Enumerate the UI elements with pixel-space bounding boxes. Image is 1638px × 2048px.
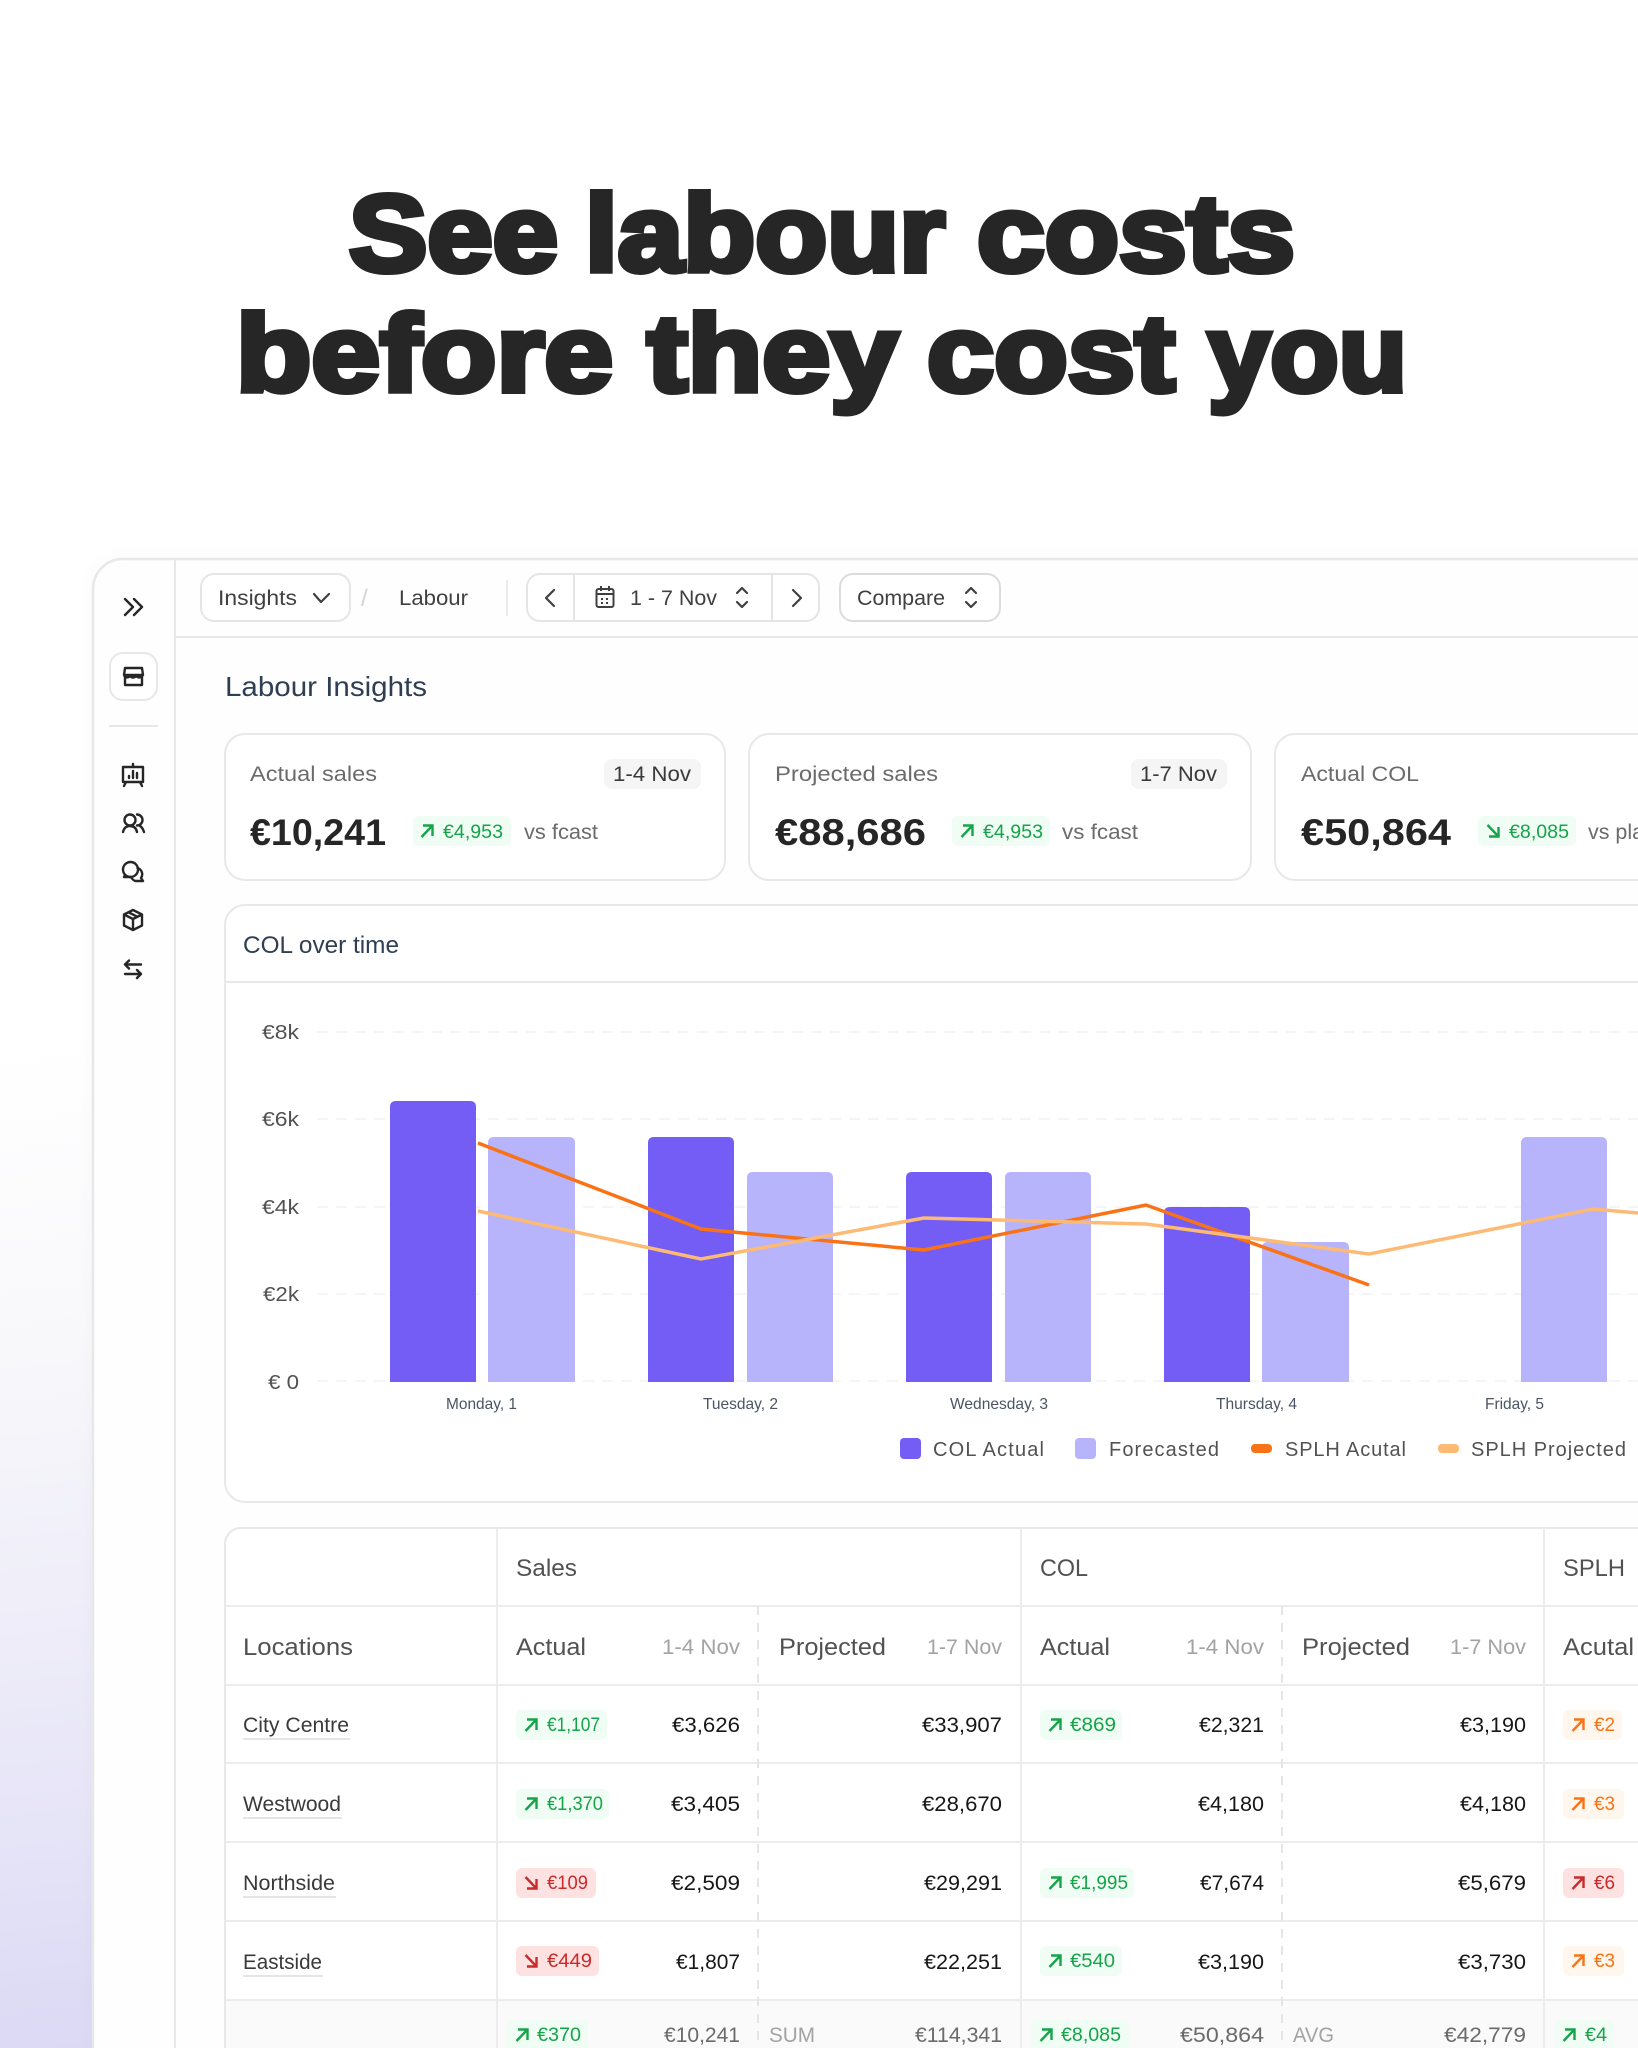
row: Northside: €2,509 — [671, 1872, 740, 1895]
row: Northside: €7,674 — [1200, 1872, 1264, 1895]
row: Westwood: €1,370 — [547, 1794, 603, 1815]
compare dropdown — [840, 574, 1000, 621]
row: Westwood: €4,180 — [1460, 1793, 1526, 1816]
table column headers: Actual — [1040, 1634, 1110, 1661]
row: Westwood: €28,670 — [922, 1793, 1002, 1816]
icon: box — [124, 910, 142, 930]
row: Northside: €5,679 — [1458, 1872, 1526, 1895]
row: Northside — [243, 1868, 1624, 1898]
row: City Centre: City Centre — [243, 1714, 349, 1737]
row: Westwood: €3,405 — [671, 1793, 740, 1816]
row: Westwood: €3 — [1594, 1794, 1615, 1815]
title: before — [236, 293, 613, 415]
row: totals: €114,341 — [915, 2024, 1002, 2047]
date range picker — [527, 574, 819, 621]
row: City Centre: €3,190 — [1460, 1714, 1526, 1737]
y axis labels: € 0 — [268, 1372, 299, 1394]
date badge: 1-4 Nov — [613, 763, 692, 786]
row: totals: €42,779 — [1444, 2024, 1526, 2047]
row: Eastside: €3 — [1594, 1951, 1615, 1972]
table grid — [226, 1529, 1638, 2048]
table column headers: 1-4 Nov — [1186, 1636, 1265, 1659]
bars: forecasted — [488, 1137, 1607, 1382]
y axis labels: €6k — [262, 1109, 300, 1131]
table column headers: 1-4 Nov — [662, 1636, 741, 1659]
panel: sidebar — [109, 560, 175, 2048]
insights dropdown — [201, 574, 350, 621]
row: totals: €8,085 — [1061, 2025, 1121, 2046]
insights dropdown: Insights — [218, 587, 297, 610]
row: Eastside: €449 — [547, 1951, 592, 1972]
row: City Centre: €2 — [1594, 1715, 1615, 1736]
x axis labels: Monday, 1 — [446, 1396, 517, 1413]
panel: COL over time chart — [225, 905, 1638, 1502]
legend: SPLH Acutal — [1285, 1439, 1406, 1461]
row: totals — [507, 2020, 1614, 2048]
row: Northside: €109 — [547, 1873, 588, 1894]
title: cost — [927, 293, 1175, 415]
date badge — [604, 759, 701, 789]
table column headers: 1-7 Nov — [1450, 1636, 1527, 1659]
date badge — [1131, 759, 1227, 789]
row: City Centre — [243, 1710, 1622, 1740]
row: totals: €4 — [1585, 2025, 1607, 2046]
x axis labels: Tuesday, 2 — [703, 1396, 778, 1413]
table group headers: SPLH — [1563, 1555, 1625, 1582]
line: SPLH projected — [478, 1209, 1638, 1259]
table column headers — [243, 1634, 1634, 1661]
row: Northside: €1,995 — [1070, 1873, 1128, 1894]
panel: actual COL card: Actual COL — [1301, 763, 1419, 786]
row: City Centre: €3,626 — [672, 1714, 740, 1737]
panel: projected sales card — [749, 734, 1251, 880]
row: Northside: Northside — [243, 1872, 335, 1895]
panel: actual sales card: vs fcast — [524, 821, 598, 844]
breadcrumb: labour: Labour — [399, 587, 468, 610]
icon: users — [123, 814, 144, 832]
x axis labels — [446, 1396, 1544, 1413]
chart heading: COL over time — [243, 932, 399, 959]
row: Eastside — [243, 1946, 1624, 1976]
date range picker: 1 - 7 Nov — [630, 587, 718, 610]
table group headers: COL — [1040, 1555, 1088, 1582]
delta badge: €4,953 — [983, 822, 1043, 843]
line: SPLH actual — [478, 1143, 1369, 1285]
row: totals: €10,241 — [664, 2024, 740, 2047]
legend: SPLH Projected — [1471, 1439, 1626, 1461]
panel: top navigation bar — [175, 574, 1638, 637]
row: City Centre: €1,107 — [547, 1715, 600, 1736]
delta badge — [1478, 816, 1576, 846]
row: City Centre: €2,321 — [1199, 1714, 1264, 1737]
app window frame — [93, 559, 1638, 2048]
row: Eastside: €3,730 — [1458, 1951, 1526, 1974]
panel: locations table — [225, 1528, 1638, 2048]
row: City Centre: €869 — [1070, 1715, 1116, 1736]
y axis labels — [262, 1022, 300, 1394]
row: totals: AVG — [1293, 2024, 1334, 2047]
title: costs — [977, 173, 1295, 295]
delta badge — [952, 816, 1050, 846]
icon: calendar — [596, 586, 614, 607]
icon: transfer arrows — [125, 960, 141, 978]
panel: projected sales card: Projected sales — [775, 763, 938, 786]
table column headers: Acutal — [1563, 1634, 1634, 1661]
y axis labels: €2k — [263, 1284, 300, 1306]
panel: actual COL card: €50,864 — [1301, 812, 1451, 853]
x axis labels: Friday, 5 — [1485, 1396, 1544, 1413]
row: Westwood: €4,180 — [1198, 1793, 1264, 1816]
row: Eastside: €3,190 — [1198, 1951, 1264, 1974]
title: See — [349, 173, 558, 295]
panel: actual sales card: €10,241 — [250, 812, 386, 853]
delta badge — [413, 816, 511, 846]
y axis labels: €4k — [262, 1197, 300, 1219]
title: labour — [585, 173, 945, 295]
row: Northside: €29,291 — [924, 1872, 1002, 1895]
icon: store button — [110, 653, 157, 700]
icon: expand chevrons — [125, 599, 142, 615]
table column headers: Projected — [1302, 1634, 1410, 1661]
panel: actual COL card — [1275, 734, 1638, 880]
title — [236, 173, 1407, 415]
panel: actual sales card: Actual sales — [250, 763, 377, 786]
x axis labels: Wednesday, 3 — [950, 1396, 1048, 1413]
row: Eastside: Eastside — [243, 1951, 322, 1974]
row: Eastside: €540 — [1070, 1951, 1115, 1972]
legend: COL Actual — [933, 1439, 1044, 1461]
row: Northside: €6 — [1594, 1873, 1615, 1894]
y axis labels: €8k — [262, 1022, 300, 1044]
x axis labels: Thursday, 4 — [1216, 1396, 1297, 1413]
row: Eastside: €22,251 — [924, 1951, 1002, 1974]
table group headers — [516, 1555, 1625, 1582]
page heading: Labour Insights — [225, 671, 427, 702]
compare dropdown: Compare — [857, 587, 945, 610]
table column headers: 1-7 Nov — [927, 1636, 1003, 1659]
row: Westwood: Westwood — [243, 1793, 341, 1816]
icon: chat bubbles — [123, 862, 143, 881]
icon: presentation chart — [123, 764, 143, 786]
bars: COL actual — [390, 1101, 1250, 1382]
panel: projected sales card: vs fcast — [1062, 821, 1138, 844]
table group headers: Sales — [516, 1555, 577, 1582]
table column headers: Actual — [516, 1634, 586, 1661]
panel: projected sales card: €88,686 — [775, 812, 926, 853]
row: Eastside: €1,807 — [676, 1951, 740, 1974]
panel: actual sales card — [225, 734, 725, 880]
row: totals: €370 — [537, 2025, 581, 2046]
delta badge: €4,953 — [443, 822, 503, 843]
legend: Forecasted — [1109, 1439, 1219, 1461]
table column headers: Projected — [779, 1634, 886, 1661]
row: City Centre: €33,907 — [922, 1714, 1002, 1737]
row: totals: €50,864 — [1180, 2024, 1264, 2047]
title: you — [1208, 293, 1407, 415]
table column headers: Locations — [243, 1634, 353, 1661]
delta badge: €8,085 — [1509, 822, 1569, 843]
date badge: 1-7 Nov — [1140, 763, 1218, 786]
row: Westwood — [243, 1789, 1624, 1819]
breadcrumb separator: / — [361, 585, 368, 612]
title: they — [647, 293, 898, 415]
row: totals: SUM — [769, 2024, 815, 2047]
legend — [900, 1438, 1626, 1461]
